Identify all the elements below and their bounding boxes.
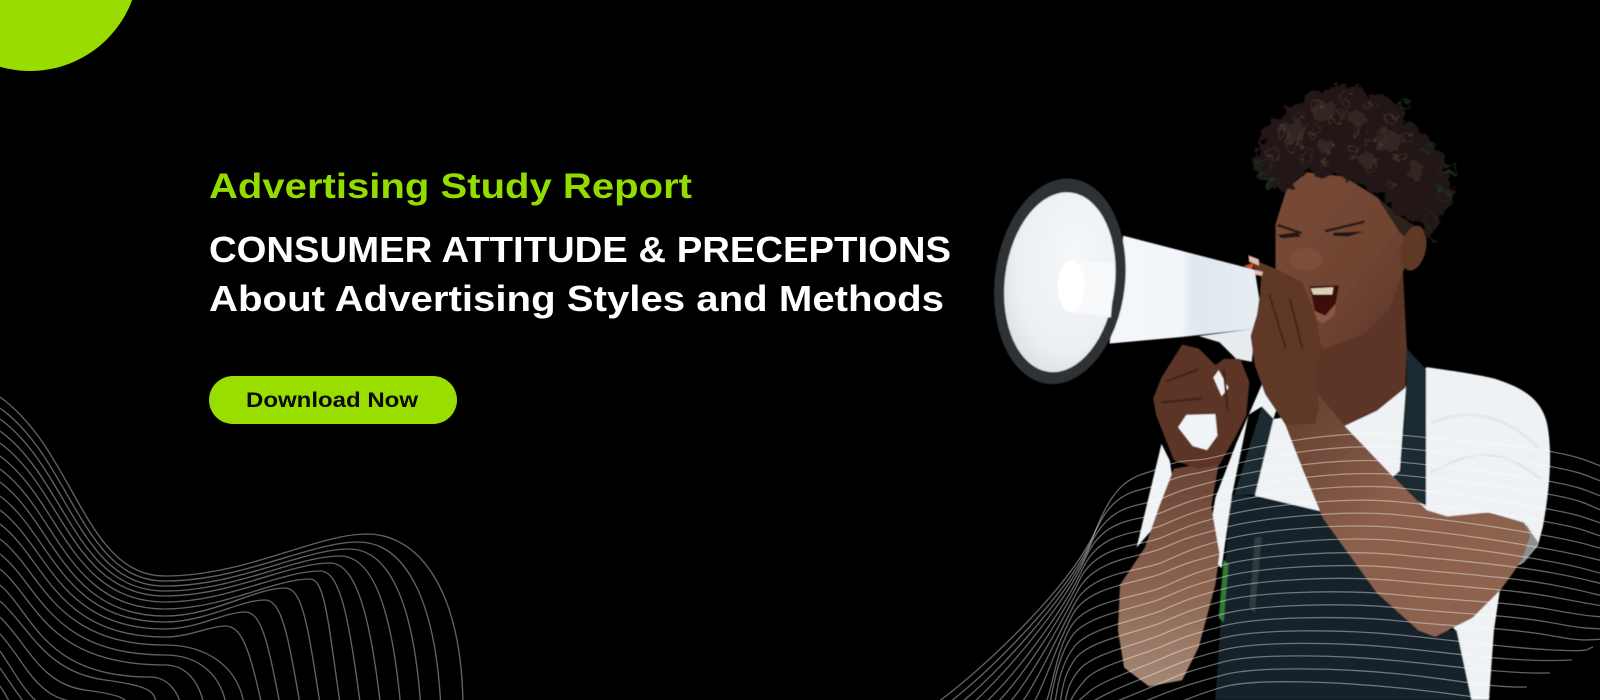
title line two: About Advertising Styles and Methods	[209, 278, 944, 319]
left wave line pattern	[0, 397, 463, 700]
handle upper part	[1213, 370, 1229, 396]
eyes	[1278, 232, 1364, 238]
eyebrow heading: Advertising Study Report	[209, 167, 692, 206]
gripping hand	[1153, 344, 1249, 469]
dark striped apron	[1215, 349, 1472, 700]
megaphone horn body	[1110, 236, 1259, 344]
hand at the mouth	[1244, 255, 1321, 425]
face	[1275, 172, 1418, 349]
person shouting through a megaphone	[983, 84, 1550, 700]
megaphone rim	[983, 171, 1137, 392]
megaphone driver	[1057, 261, 1115, 317]
green corner circle	[0, 0, 139, 71]
eyebrows	[1278, 222, 1365, 233]
ear	[1397, 223, 1430, 273]
white t-shirt	[1137, 367, 1550, 700]
open mouth	[1310, 285, 1339, 324]
megaphone cone interior	[994, 186, 1126, 379]
neck	[1307, 268, 1407, 427]
main title	[209, 229, 951, 319]
download button	[209, 376, 457, 424]
far forearm and elbow	[1118, 460, 1219, 686]
megaphone bracket	[1199, 329, 1255, 362]
title line one: CONSUMER ATTITUDE & PRECEPTIONS	[209, 229, 951, 270]
curly hair	[1255, 84, 1456, 245]
near forearm and upper arm	[1273, 390, 1530, 637]
right wave line pattern	[938, 434, 1600, 700]
temple fade	[1377, 197, 1418, 245]
nose	[1289, 248, 1322, 271]
megaphone	[983, 171, 1259, 392]
download button: Download Now	[246, 389, 419, 412]
handle grip	[1178, 414, 1217, 450]
